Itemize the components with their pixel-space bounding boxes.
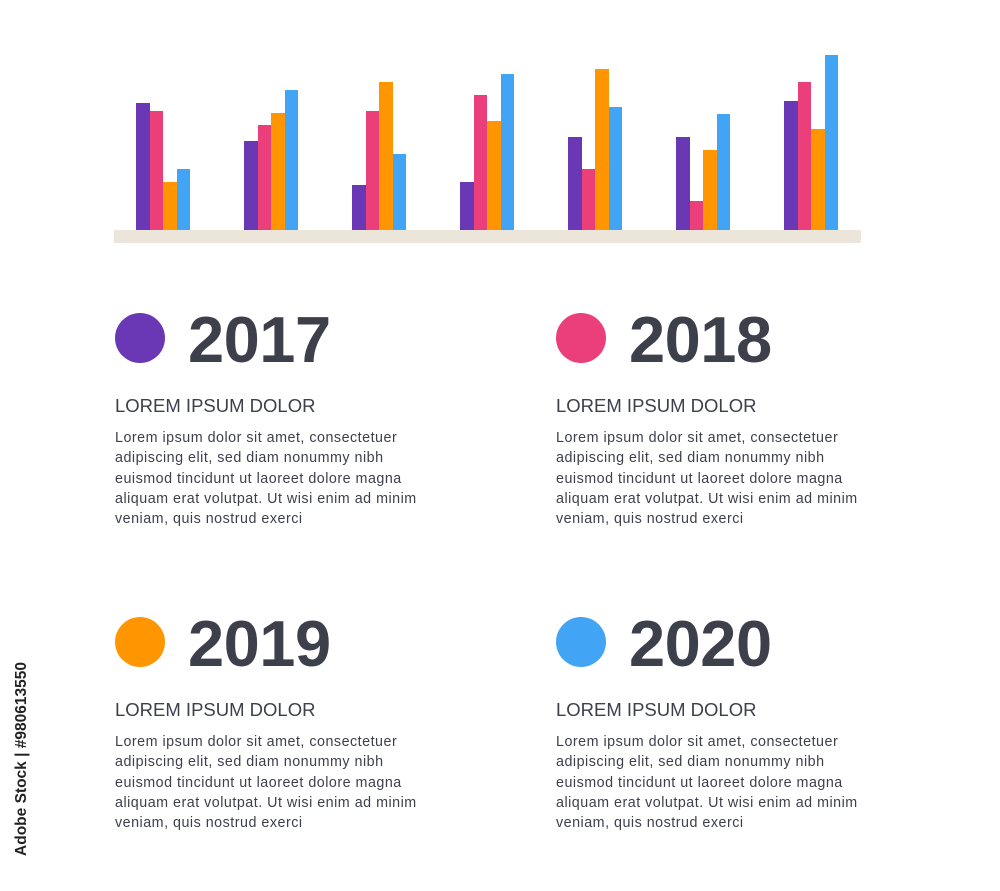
icon: blue dot [556,617,606,667]
panel: 2020 [556,607,858,831]
body text: aliquam erat volutpat. Ut wisi enim ad minim [115,491,417,507]
body text: veniam, quis nostrud exerci [556,815,744,831]
body text: adipiscing elit, sed diam nonummy nibh [556,450,825,466]
body text: aliquam erat volutpat. Ut wisi enim ad minim [556,795,858,811]
body text [556,430,858,527]
body text: aliquam erat volutpat. Ut wisi enim ad minim [115,795,417,811]
icon: pink dot [556,313,606,363]
panel: 2019 [115,607,417,831]
body text: adipiscing elit, sed diam nonummy nibh [115,450,384,466]
year 2017: 2017 [188,303,331,376]
panel: 2018 [556,303,858,527]
body text [115,734,417,831]
watermark id: Adobe Stock | #980613550 [13,662,30,856]
body text: Lorem ipsum dolor sit amet, consectetuer [556,734,838,750]
heading: LOREM IPSUM DOLOR [115,699,315,720]
year 2019: 2019 [188,607,331,680]
body text: Lorem ipsum dolor sit amet, consectetuer [556,430,838,446]
body text: euismod tincidunt ut laoreet dolore magna [556,775,843,791]
icon: orange dot [115,617,165,667]
body text: euismod tincidunt ut laoreet dolore magna [556,471,843,487]
body text: Lorem ipsum dolor sit amet, consectetuer [115,734,397,750]
year 2020: 2020 [629,607,772,680]
body text [115,430,417,527]
body text: adipiscing elit, sed diam nonummy nibh [115,754,384,770]
body text: euismod tincidunt ut laoreet dolore magna [115,775,402,791]
heading: LOREM IPSUM DOLOR [556,699,756,720]
body text: aliquam erat volutpat. Ut wisi enim ad minim [556,491,858,507]
body text: veniam, quis nostrud exerci [115,511,303,527]
icon: purple dot [115,313,165,363]
year 2018: 2018 [629,303,772,376]
panel: 2017 [115,303,417,527]
bar chart [114,55,861,243]
body text: veniam, quis nostrud exerci [556,511,744,527]
heading: LOREM IPSUM DOLOR [115,395,315,416]
body text: veniam, quis nostrud exerci [115,815,303,831]
heading: LOREM IPSUM DOLOR [556,395,756,416]
body text: Lorem ipsum dolor sit amet, consectetuer [115,430,397,446]
body text: adipiscing elit, sed diam nonummy nibh [556,754,825,770]
body text: euismod tincidunt ut laoreet dolore magna [115,471,402,487]
body text [556,734,858,831]
